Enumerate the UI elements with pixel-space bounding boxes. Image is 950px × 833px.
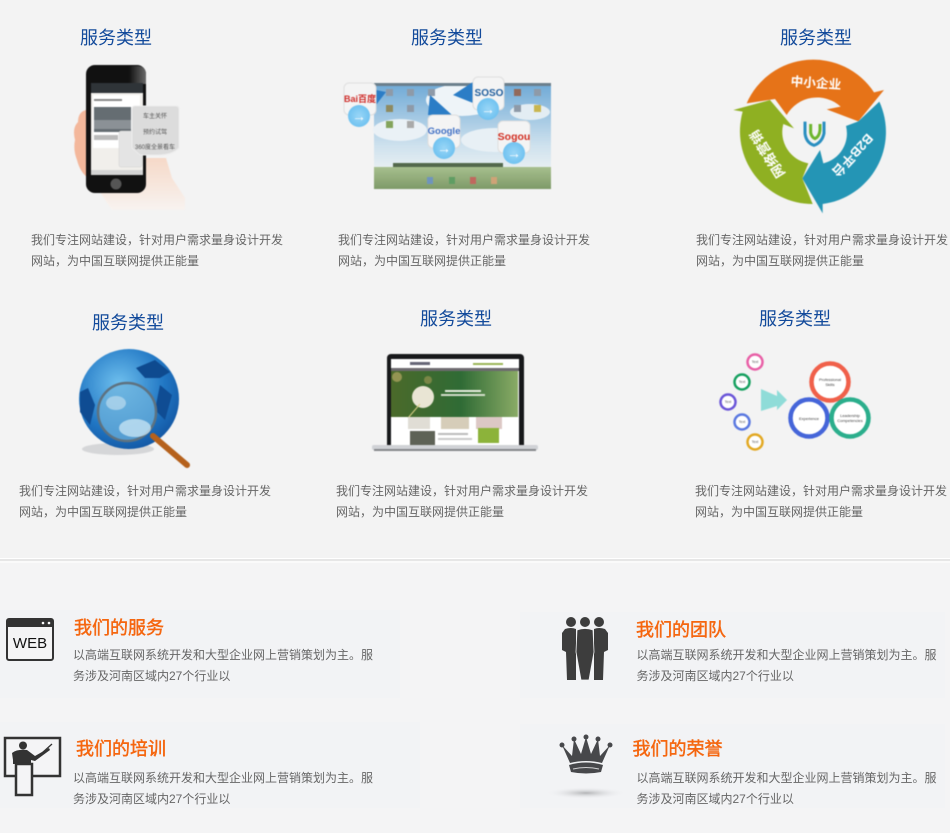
heading: 服务类型 (780, 28, 852, 48)
text block: 我们专注网站建设，针对用户需求量身设计开发 (31, 233, 283, 247)
text block: 我们专注网站建设，针对用户需求量身设计开发 (338, 233, 590, 247)
panel: service 5 laptop (336, 309, 588, 519)
heading: 服务类型 (411, 28, 483, 48)
icon: competency circles diagram: Professional (819, 377, 841, 382)
icon: three people (562, 617, 608, 680)
text block: 我们专注网站建设，针对用户需求量身设计开发 (336, 484, 588, 498)
icon: phone in hand: 360度全景看车 (135, 143, 175, 151)
icon: competency circles diagram: Experience (799, 416, 820, 421)
heading: 服务类型 (92, 313, 164, 333)
icon: phone in hand: 车主关怀 (143, 112, 167, 120)
text block (636, 648, 937, 683)
text block: 以高端互联网系统开发和大型企业网上营销策划为主。服 (73, 771, 373, 785)
text block: 务涉及河南区域内27个行业以 (636, 669, 794, 683)
heading: 服务类型 (420, 309, 492, 329)
text block: 网站，为中国互联网提供正能量 (31, 254, 199, 268)
text block: 我们专注网站建设，针对用户需求量身设计开发 (695, 484, 947, 498)
icon: three arrow cycle: 网络营销 (746, 127, 788, 181)
icon: presenter at board (4, 736, 62, 796)
heading: 我们的服务 (74, 618, 164, 638)
text block (31, 233, 283, 268)
panel: service 2 search engines (338, 28, 590, 268)
panel: our honors (560, 734, 937, 806)
icon: web window: WEB (13, 635, 47, 652)
text block: 我们专注网站建设，针对用户需求量身设计开发 (696, 233, 948, 247)
icon: laptop with website (372, 353, 538, 452)
icon: search engine screen (344, 76, 552, 190)
heading: 我们的培训 (76, 739, 166, 759)
panel: our training (4, 736, 373, 806)
heading: 我们的荣誉 (632, 739, 722, 759)
icon: search engine screen: → (507, 145, 521, 161)
text block: 务涉及河南区域内27个行业以 (73, 669, 230, 683)
icon: search engine screen: Sogou (498, 131, 530, 143)
lower section background (0, 558, 950, 833)
panel: our team (562, 617, 937, 683)
icon: competency circles diagram: Skills (825, 382, 835, 387)
icon: competency circles diagram: Text (739, 420, 745, 424)
text block (696, 233, 948, 268)
icon: competency circles diagram: Text (739, 380, 745, 384)
text block (336, 484, 588, 519)
text block: 务涉及河南区域内27个行业以 (73, 792, 230, 806)
text block: 以高端互联网系统开发和大型企业网上营销策划为主。服 (636, 648, 937, 662)
text block: 以高端互联网系统开发和大型企业网上营销策划为主。服 (636, 771, 937, 785)
icon: three arrow cycle: B2B平台 (829, 131, 877, 181)
icon: search engine screen: → (481, 101, 495, 117)
icon: competency circles diagram (718, 352, 872, 452)
icon: three arrow cycle (733, 58, 887, 214)
icon: search engine screen: → (352, 108, 366, 124)
text block (73, 771, 373, 806)
icon: search engine screen: Google (428, 126, 460, 137)
icon: competency circles diagram: Competencies (837, 418, 863, 423)
icon: search engine screen: Bai百度 (344, 93, 376, 104)
panel: our services (6, 618, 373, 683)
panel: service 3 cycle (696, 28, 948, 268)
panel: service 1 phone (31, 28, 283, 268)
text block: 网站，为中国互联网提供正能量 (696, 254, 864, 268)
icon: competency circles diagram: Text (725, 400, 731, 404)
text block: 我们专注网站建设，针对用户需求量身设计开发 (19, 484, 271, 498)
text block: 务涉及河南区域内27个行业以 (636, 792, 794, 806)
heading: 我们的团队 (636, 620, 726, 640)
text block (338, 233, 590, 268)
panel: service 4 globe (19, 313, 271, 519)
heading: 服务类型 (80, 28, 152, 48)
text block (73, 648, 373, 683)
icon: globe with magnifier (78, 348, 191, 469)
icon: competency circles diagram: Leadership (840, 413, 861, 418)
icon: search engine screen: → (437, 140, 451, 156)
text block: 以高端互联网系统开发和大型企业网上营销策划为主。服 (73, 648, 373, 662)
panel: service 6 circles (695, 309, 947, 519)
icon: phone in hand: 预约试驾 (143, 128, 167, 136)
icon: competency circles diagram: Text (752, 440, 758, 444)
heading: 服务类型 (759, 309, 831, 329)
text block: 网站，为中国互联网提供正能量 (19, 505, 187, 519)
text block (19, 484, 271, 519)
icon: web window (6, 618, 54, 661)
icon: crown with shadow (560, 734, 612, 797)
icon: phone in hand (74, 64, 184, 203)
icon: search engine screen: SOSO (475, 88, 504, 99)
text block: 网站，为中国互联网提供正能量 (695, 505, 863, 519)
text block: 网站，为中国互联网提供正能量 (338, 254, 506, 268)
text block (636, 771, 937, 806)
icon: three arrow cycle: 中小企业 (790, 74, 842, 92)
icon: competency circles diagram: Text (752, 360, 758, 364)
text block: 网站，为中国互联网提供正能量 (336, 505, 504, 519)
text block (695, 484, 947, 519)
